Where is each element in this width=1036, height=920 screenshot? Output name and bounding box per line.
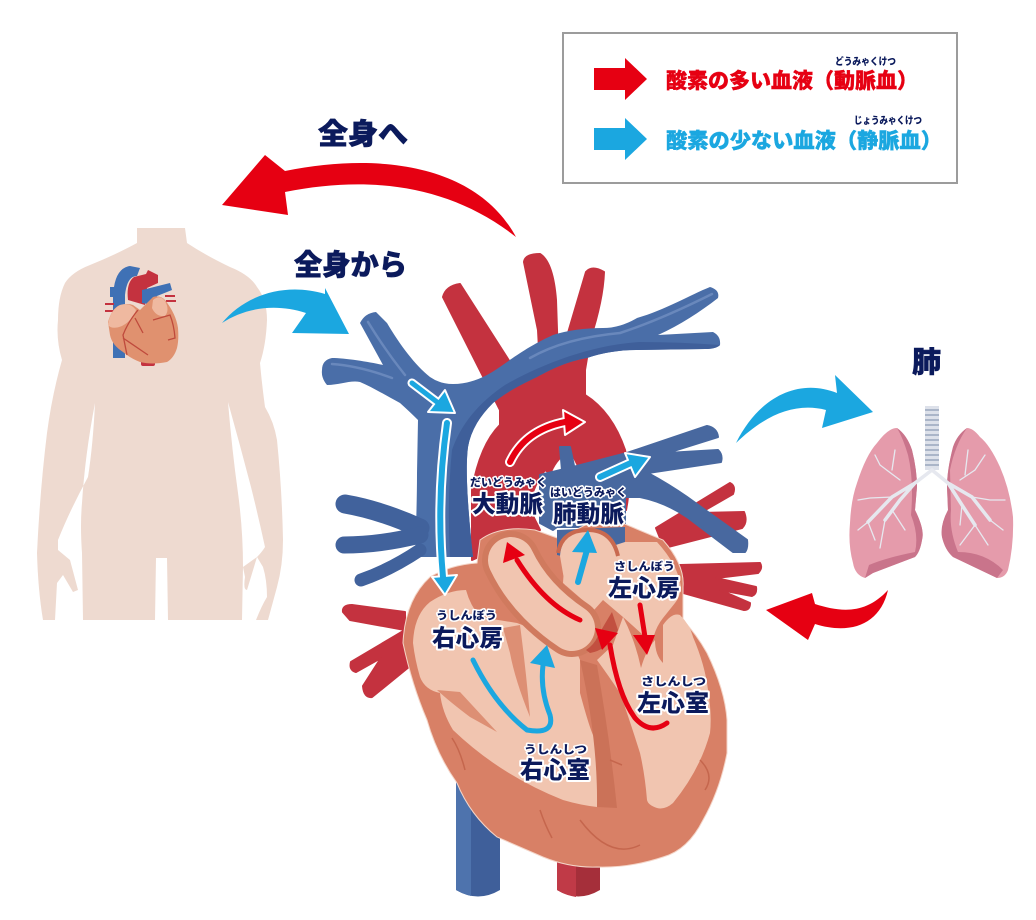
label: left ventricle: [637, 675, 709, 716]
label: aorta: だいどうみゃく: [470, 475, 547, 489]
heart muscle: [403, 520, 727, 867]
label: pulmonary artery: [550, 485, 627, 527]
label: left atrium: 左心房: [608, 575, 680, 601]
label: right atrium: うしんぼう: [436, 608, 497, 622]
legend: oxygen-poor blood: 酸素の少ない血液（静脈血）: [666, 129, 942, 153]
left ventricle chamber: [597, 614, 711, 808]
pulmonary valve tube: [558, 530, 618, 600]
right ventricle muscle flaps: [437, 625, 530, 732]
left lung: [849, 428, 923, 578]
label: left ventricle: 左心室: [637, 690, 709, 716]
arrow: blue superior vena cava in: [412, 383, 455, 413]
aortic outflow tract: [511, 560, 572, 628]
large heart diagram: [322, 254, 761, 897]
legend: oxygen-rich blood: [594, 55, 918, 100]
arrow: blue right ventricle up: [473, 645, 555, 731]
right lung: [942, 428, 1013, 578]
arrow: blue down to right atrium: [432, 423, 457, 595]
right lung shading: [942, 428, 1003, 578]
white gap under the aortic arch: [552, 452, 580, 472]
legend: oxygen-poor blood: じょうみゃくけつ: [854, 115, 922, 127]
flow arrows inside the heart: [412, 383, 667, 731]
legend: oxygen-poor blood: [594, 115, 942, 160]
small heart icon in the chest: [105, 266, 178, 366]
label: pulmonary artery: はいどうみゃく: [550, 485, 627, 499]
arrow: blue to lungs: [736, 375, 873, 443]
arrow: red to whole body: [222, 155, 516, 237]
label: left ventricle: さしんしつ: [641, 675, 706, 688]
lungs illustration: [849, 406, 1013, 578]
bronchial tree: [858, 450, 1005, 548]
arrow: red up the outflow tract: [503, 542, 580, 620]
arrow: red from lungs: [766, 590, 888, 640]
legend: oxygen-rich blood: 酸素の多い血液（動脈血）: [666, 69, 918, 93]
heading: lungs: 肺: [912, 346, 941, 379]
legend panel: [563, 33, 957, 183]
label: aorta: 大動脈: [472, 491, 544, 517]
label: right atrium: 右心房: [432, 625, 503, 651]
pulmonary artery base behind valve: [557, 527, 625, 565]
label: right ventricle: [520, 743, 590, 783]
right atrium and right ventricle chamber: [413, 590, 597, 807]
left lung shading: [865, 428, 923, 578]
label: pulmonary artery: 肺動脈: [553, 501, 625, 527]
inferior vena cava: [456, 770, 500, 896]
descending aorta: [557, 840, 600, 897]
label: right atrium: [432, 608, 503, 651]
superior vena cava: [322, 287, 720, 580]
arrow: blue from whole body: [222, 288, 349, 334]
arrow: red left ventricle up: [595, 628, 667, 728]
label: aorta: [470, 475, 547, 517]
label: left atrium: さしんぼう: [614, 559, 675, 573]
legend: oxygen-rich blood: どうみゃくけつ: [835, 55, 896, 68]
arrow: blue up pulmonary trunk: [572, 530, 597, 582]
pulmonary artery: [540, 426, 747, 552]
pulmonary veins and aortic branches in red: [343, 254, 761, 697]
heading: from whole body: 全身から: [294, 249, 407, 282]
label: right ventricle: うしんしつ: [524, 743, 587, 756]
arrow: red up the aorta: [510, 410, 585, 462]
heading: to whole body: 全身へ: [318, 118, 408, 151]
arrow: blue pulmonary artery out: [600, 453, 650, 477]
label: right ventricle: 右心室: [520, 757, 590, 783]
valve accent: [586, 612, 618, 653]
label: left atrium: [608, 559, 680, 601]
epicardial creases: [452, 738, 709, 849]
left atrium chamber: [563, 542, 681, 643]
human body silhouette: [37, 228, 283, 620]
trachea: [925, 406, 939, 470]
arrow: red left atrium to ventricle: [633, 605, 655, 655]
septum shadow: [580, 660, 617, 808]
